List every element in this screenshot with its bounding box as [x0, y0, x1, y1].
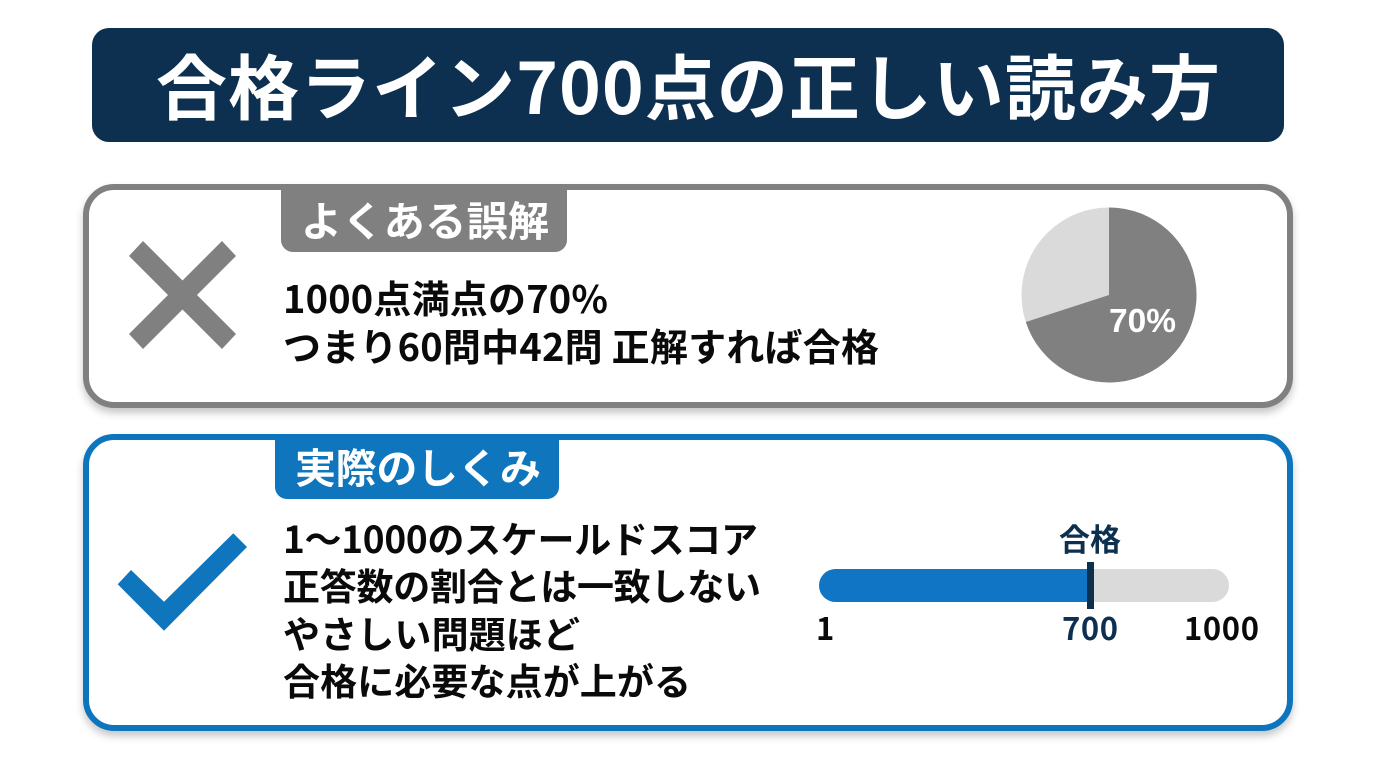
text block: misconception explanation	[283, 269, 879, 372]
label: 700: 700	[1062, 604, 1118, 649]
label: 合格: 合格	[1059, 515, 1121, 560]
text block: mechanism explanation	[283, 510, 761, 706]
text block: mechanism explanation: 正答数の割合とは一致しない	[283, 557, 761, 611]
text block: mechanism explanation: やさしい問題ほど	[283, 605, 580, 659]
panel: actual mechanism	[86, 435, 1290, 728]
score scale bar	[816, 515, 1259, 649]
icon: cross mark	[129, 241, 236, 349]
text block: misconception explanation: 1000点満点の70%	[283, 269, 608, 324]
pie chart: 70%	[1022, 208, 1197, 382]
panel frame: misconception	[86, 187, 1290, 405]
icon: check mark	[118, 533, 247, 631]
scale fill to 700	[819, 569, 1088, 602]
label: 1: 1	[816, 604, 834, 649]
panel frame: mechanism	[86, 437, 1290, 728]
title banner: 合格ライン700点の正しい読み方	[156, 33, 1220, 135]
text block: misconception explanation: つまり60問中42問 正解すれば合格	[283, 317, 879, 372]
label: 1000: 1000	[1184, 604, 1259, 649]
marker: 700 line	[1087, 562, 1094, 609]
panel: common misconception	[86, 187, 1290, 405]
text block: mechanism explanation: 合格に必要な点が上がる	[283, 652, 691, 706]
heading tag: よくある誤解: よくある誤解	[301, 188, 549, 248]
heading tag: 実際のしくみ: 実際のしくみ	[295, 435, 541, 495]
text block: mechanism explanation: 1～1000のスケールドスコア	[283, 510, 758, 564]
scale track	[819, 569, 1229, 602]
pie chart: 70%: 70%	[1109, 302, 1176, 339]
